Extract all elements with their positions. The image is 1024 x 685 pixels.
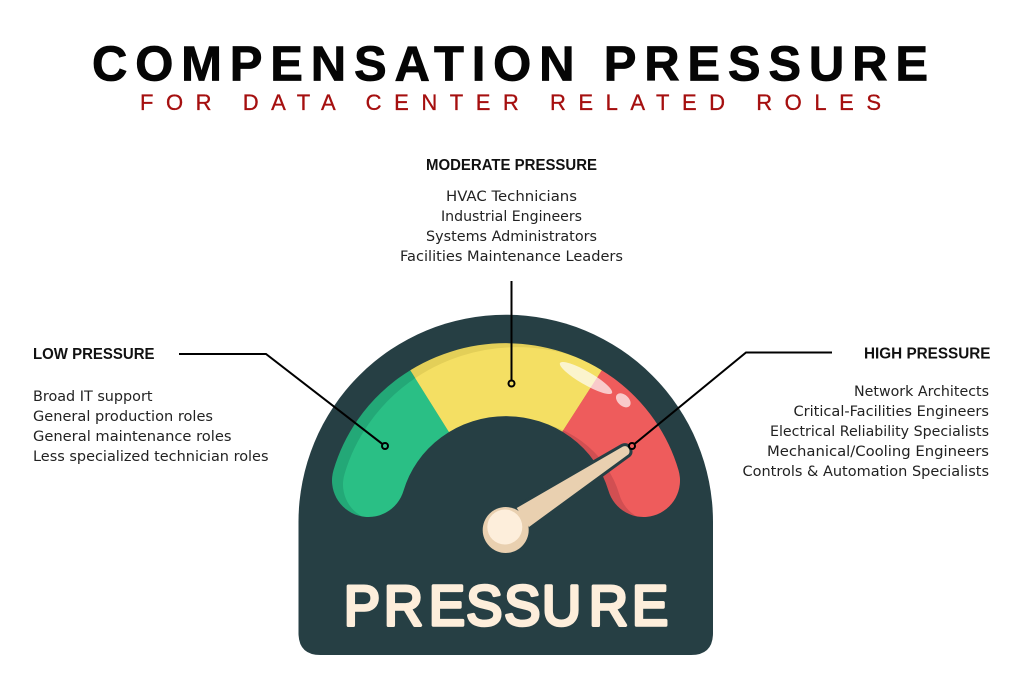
needle (483, 446, 630, 553)
list: high pressure roles: Network Architects (854, 384, 989, 400)
panel: high pressure (742, 346, 990, 480)
list: high pressure roles: Electrical Reliability Specialists (770, 424, 989, 440)
leader line: high pressure (629, 352, 832, 449)
list: moderate pressure roles (400, 189, 623, 265)
leader line: moderate pressure (508, 281, 514, 386)
list: low pressure roles: Broad IT support (33, 389, 153, 405)
panel: moderate pressure (400, 157, 623, 265)
heading: high pressure: HIGH PRESSURE (864, 346, 990, 363)
panel: low pressure (33, 346, 268, 465)
list: low pressure roles: General production roles (33, 409, 213, 425)
leader line: low pressure (179, 354, 388, 449)
list: high pressure roles: Critical-Facilities Engineers (794, 404, 989, 420)
subtitle: FOR DATA CENTER RELATED ROLES (140, 90, 881, 115)
gauge colour band (332, 343, 680, 517)
list: low pressure roles: General maintenance roles (33, 429, 232, 445)
list: low pressure roles: Less specialized technician roles (33, 449, 268, 465)
list: moderate pressure roles: Systems Administrators (426, 229, 597, 245)
list: moderate pressure roles: Facilities Maintenance Leaders (400, 249, 623, 265)
heading: low pressure: LOW PRESSURE (33, 346, 154, 363)
title: COMPENSATION PRESSURE (92, 38, 928, 92)
list: high pressure roles (742, 384, 989, 480)
gauge highlights (557, 357, 633, 410)
heading: moderate pressure: MODERATE PRESSURE (426, 157, 597, 174)
list: high pressure roles: Mechanical/Cooling Engineers (767, 444, 989, 460)
list: high pressure roles: Controls & Automation Specialists (742, 464, 989, 480)
gauge body (298, 315, 713, 655)
gauge label: PRESSURE (344, 574, 668, 637)
list: moderate pressure roles: Industrial Engineers (441, 209, 582, 225)
list: moderate pressure roles: HVAC Technicians (446, 189, 577, 205)
list: low pressure roles (33, 389, 268, 465)
